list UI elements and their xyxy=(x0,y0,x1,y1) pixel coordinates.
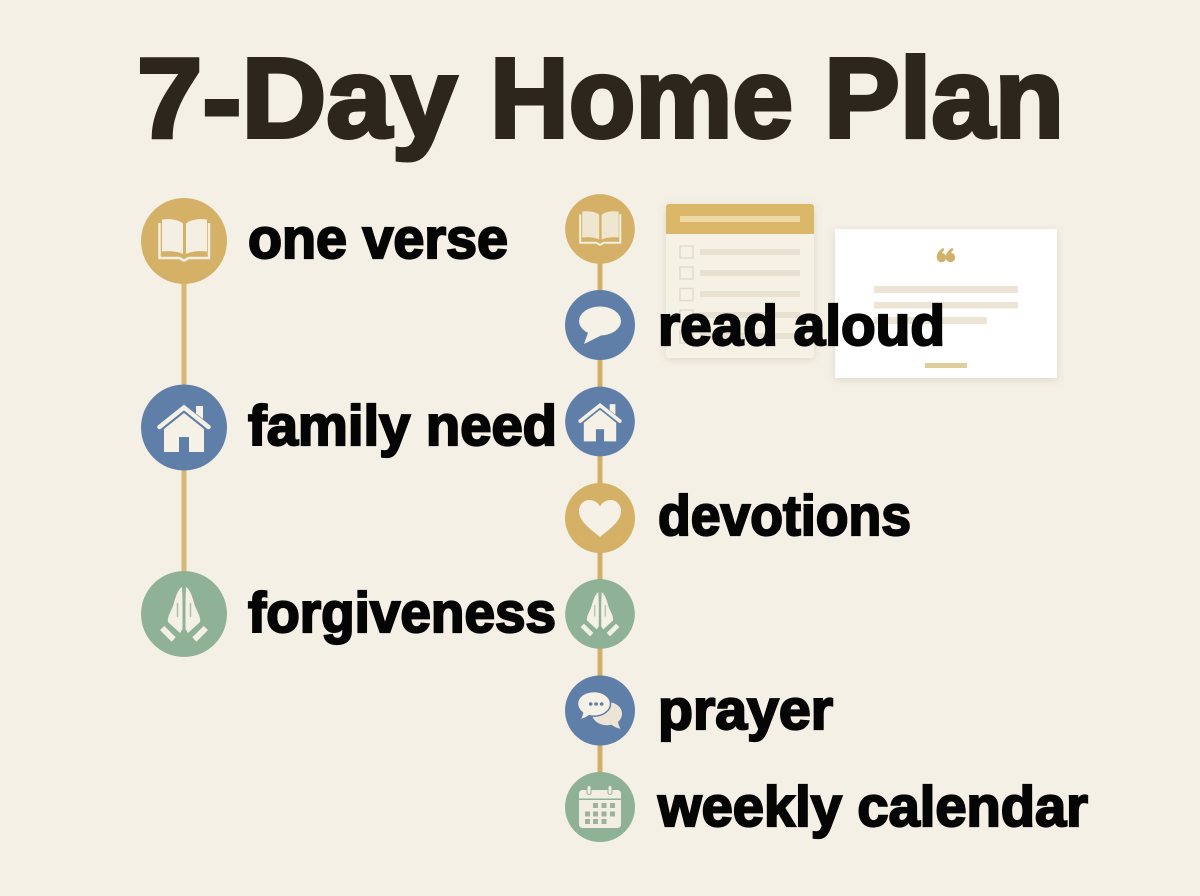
calendar days xyxy=(585,803,615,824)
panel: checklist card xyxy=(666,204,814,358)
icon: chat bubbles xyxy=(565,676,635,746)
quote mark xyxy=(937,248,955,262)
label: forgiveness xyxy=(248,581,556,645)
right step: devotions xyxy=(565,483,911,553)
icon: praying hands xyxy=(141,571,227,657)
label: prayer xyxy=(658,678,833,742)
icon: house xyxy=(141,384,227,470)
left step: family need xyxy=(141,384,557,470)
right step: prayer xyxy=(565,676,833,746)
checklist header xyxy=(666,204,814,234)
label: weekly calendar xyxy=(657,775,1088,839)
checklist rows xyxy=(680,246,800,343)
icon: speech bubble xyxy=(565,290,635,360)
title xyxy=(137,35,1064,161)
right step: book xyxy=(565,194,635,264)
right step: read aloud xyxy=(565,290,945,360)
icon: open book xyxy=(141,198,227,284)
connector: right timeline xyxy=(598,260,602,780)
label: devotions xyxy=(658,484,911,548)
quote underline xyxy=(925,363,967,368)
typing dots xyxy=(589,702,604,706)
panel: quote card xyxy=(835,229,1057,378)
connector: left timeline xyxy=(182,280,186,580)
title: Plan xyxy=(824,35,1064,161)
icon: heart xyxy=(565,483,635,553)
right step: house xyxy=(565,387,635,456)
right step: weekly calendar xyxy=(565,772,1088,842)
title: 7-Day xyxy=(137,35,457,161)
label: family need xyxy=(248,394,557,458)
right step: praying hands xyxy=(565,579,635,649)
left step: forgiveness xyxy=(141,571,556,657)
label: read aloud xyxy=(658,294,945,358)
quote lines xyxy=(874,286,1018,324)
left step: one verse xyxy=(141,198,508,284)
title: Home xyxy=(490,35,793,161)
icon: calendar xyxy=(565,772,635,842)
label: one verse xyxy=(248,207,508,271)
